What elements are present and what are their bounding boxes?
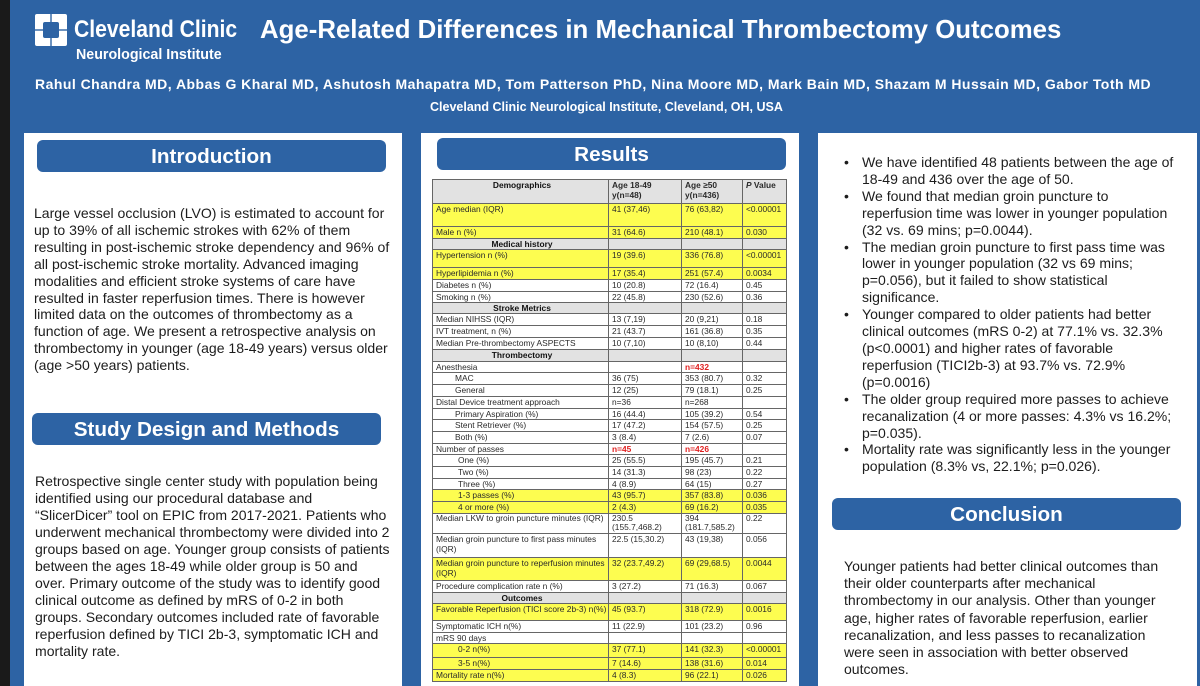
results table: P Value — [746, 180, 776, 190]
results table: 0.07 — [746, 432, 762, 442]
results table: (155.7,468.2) — [612, 522, 662, 532]
results table: <0.00001 — [746, 250, 781, 260]
results table: 43 (95.7) — [612, 490, 646, 500]
heading: Results: Results — [574, 143, 649, 166]
results table: 0.54 — [746, 409, 762, 419]
text block: results bullets: p=0.035). — [862, 424, 922, 440]
heading: Conclusion: Conclusion — [950, 503, 1063, 526]
results table: n=432 — [685, 362, 709, 372]
results table: 10 (8,10) — [685, 338, 719, 348]
results table: Anesthesia — [436, 362, 477, 372]
text block: conclusion: outcomes. — [844, 661, 909, 677]
text block: introduction: Large vessel occlusion (LVO) is estimated to account for — [34, 205, 384, 221]
results table: 72 (16.4) — [685, 280, 719, 290]
results table: Primary Aspiration (%) — [455, 409, 538, 419]
results table: Distal Device treatment approach — [436, 397, 560, 407]
panel: right column — [818, 133, 1197, 686]
results table: 22 (45.8) — [612, 292, 646, 302]
text block: conclusion — [844, 558, 1158, 677]
text block: introduction: limited data on the outcomes of thrombectomy as a — [34, 306, 353, 322]
results table: 230 (52.6) — [685, 292, 723, 302]
text block: methods: “SlicerDicer” tool on EPIC from 2017-2021. Patients who — [35, 507, 386, 523]
results table: 71 (16.3) — [685, 581, 719, 591]
text block: results bullets: (p<0.0001) and higher rates of favorable — [862, 340, 1113, 356]
heading: Study Design and Methods: Study Design and Methods — [74, 418, 339, 441]
logo wordmark: Cleveland Clinic — [74, 16, 237, 43]
results table: n=426 — [685, 444, 709, 454]
results table: 0.0044 — [746, 558, 772, 568]
text block: methods: mortality rate. — [35, 643, 120, 659]
results table: 141 (32.3) — [685, 644, 723, 654]
results table: 0.21 — [746, 455, 762, 465]
results table: Medical history — [492, 239, 552, 249]
results table: 10 (7,10) — [612, 338, 646, 348]
text block: results bullets: recanalization (4 or more passes: 4.3% vs 16.2%; — [862, 408, 1171, 424]
results table: Procedure complication rate n (%) — [436, 581, 563, 591]
results table: Outcomes — [502, 593, 542, 603]
text block: results bullets: reperfusion (TICI2b-3) at 93.7% vs. 72.9% — [862, 357, 1125, 373]
text block: results bullets: We have identified 48 patients between the age of — [862, 154, 1173, 170]
results table: Stroke Metrics — [493, 303, 551, 313]
text block: conclusion: Younger patients had better clinical outcomes than — [844, 558, 1158, 574]
text block: results bullets: The median groin puncture to first pass time was — [862, 239, 1165, 255]
results table: Symptomatic ICH n(%) — [436, 621, 521, 631]
bullet markers: • — [844, 239, 849, 255]
results table: 0-2 n(%) — [458, 644, 490, 654]
results table: 0.96 — [746, 621, 762, 631]
text block: introduction: resulting in post-ischemic stroke dependency and 96% of — [34, 239, 389, 255]
text block: methods: between the ages 18-49 while older group is 50 and — [35, 558, 358, 574]
results table: n=268 — [685, 397, 709, 407]
results table: Median NIHSS (IQR) — [436, 314, 514, 324]
results table: 0.030 — [746, 227, 767, 237]
heading: Conclusion — [832, 498, 1181, 530]
results table: 13 (7,19) — [612, 314, 646, 324]
results table: 0.026 — [746, 670, 767, 680]
results table: 0.35 — [746, 326, 762, 336]
heading: Results — [437, 138, 786, 170]
results table: 76 (63,82) — [685, 204, 723, 214]
results table: 17 (35.4) — [612, 268, 646, 278]
results table: Thrombectomy — [492, 350, 552, 360]
results table: 0.45 — [746, 280, 762, 290]
text block: conclusion: were seen in association with better observed — [844, 644, 1128, 660]
text block: methods: groups based on age. Younger group consists of patients — [35, 541, 390, 557]
results table: Three (%) — [458, 479, 495, 489]
results table: 10 (20.8) — [612, 280, 646, 290]
results table: 17 (47.2) — [612, 420, 646, 430]
text block: introduction: resulted in faster reperfusion times. There is however — [34, 290, 365, 306]
results table: Both (%) — [455, 432, 488, 442]
results table: 251 (57.4) — [685, 268, 723, 278]
results table: Hyperlipidemia n (%) — [436, 268, 514, 278]
results table: 64 (15) — [685, 479, 712, 489]
results table: 41 (37,46) — [612, 204, 650, 214]
results table: Median groin puncture to reperfusion minutes — [436, 558, 605, 568]
logo subtitle: Neurological Institute — [76, 46, 222, 63]
results table: 0.27 — [746, 479, 762, 489]
results table: 7 (14.6) — [612, 658, 641, 668]
text block: methods: groups. Secondary outcomes included rate of favorable — [35, 609, 379, 625]
panel: middle column — [421, 133, 799, 686]
authors: Rahul Chandra MD, Abbas G Kharal MD, Ashutosh Mahapatra MD, Tom Patterson PhD, Nina Moore MD, Mark Bain MD, Shazam M Hussain MD, Gabor Toth MD — [35, 76, 1151, 92]
text block: results bullets: We found that median groin puncture to — [862, 188, 1108, 204]
text block: methods: clinical outcome as defined by mRS of 0-2 in both — [35, 592, 343, 608]
text block: introduction — [34, 205, 390, 373]
text block: results bullets: Mortality rate was significantly less in the younger — [862, 441, 1170, 457]
results table: 79 (18.1) — [685, 385, 719, 395]
results table: Two (%) — [458, 467, 489, 477]
results table: 195 (45.7) — [685, 455, 723, 465]
results table: n=45 — [612, 444, 631, 454]
results table: 161 (36.8) — [685, 326, 723, 336]
results table: 69 (16.2) — [685, 502, 719, 512]
results table: 3 (27.2) — [612, 581, 641, 591]
results table: (181.7,585.2) — [685, 522, 735, 532]
results table: Male n (%) — [436, 227, 476, 237]
results table: 7 (2.6) — [685, 432, 709, 442]
results table: 0.035 — [746, 502, 767, 512]
results table: 1-3 passes (%) — [458, 490, 514, 500]
results table: 0.036 — [746, 490, 767, 500]
text block: introduction: all post-ischemic stroke mortality. Advanced imaging — [34, 256, 359, 272]
results table: 101 (23.2) — [685, 621, 723, 631]
text block: methods: Retrospective single center study with population being — [35, 473, 378, 489]
results table: 32 (23.7,49.2) — [612, 558, 664, 568]
results table: 0.25 — [746, 385, 762, 395]
results table: 36 (75) — [612, 373, 639, 383]
results table: Number of passes — [436, 444, 504, 454]
results table: 43 (19,38) — [685, 534, 723, 544]
results table: y(n=436) — [685, 190, 719, 200]
results table: Median Pre-thrombectomy ASPECTS — [436, 338, 576, 348]
bullet markers: • — [844, 154, 849, 170]
results table: Smoking n (%) — [436, 292, 491, 302]
results table: 98 (23) — [685, 467, 712, 477]
results table: 0.014 — [746, 658, 767, 668]
results table: (IQR) — [436, 568, 456, 578]
results table: 12 (25) — [612, 385, 639, 395]
results table: 4 (8.9) — [612, 479, 636, 489]
results table: mRS 90 days — [436, 633, 486, 643]
text block: introduction: modalities and efficient stroke systems of care have — [34, 273, 355, 289]
results table: 20 (9,21) — [685, 314, 719, 324]
results table: 0.18 — [746, 314, 762, 324]
text block: results bullets: 18-49 and 436 over the age of 50. — [862, 171, 1074, 187]
results table: 19 (39.6) — [612, 250, 646, 260]
text block: methods: over. Primary outcome of the study was to identify good — [35, 575, 380, 591]
results table: 154 (57.5) — [685, 420, 723, 430]
results table: IVT treatment, n (%) — [436, 326, 511, 336]
text block: introduction: thrombectomy in younger (age 18-49 years) versus older — [34, 340, 388, 356]
results table: One (%) — [458, 455, 489, 465]
text block: results bullets: significance. — [862, 289, 939, 305]
results table: General — [455, 385, 485, 395]
results table: 69 (29,68.5) — [685, 558, 730, 568]
results table: Mortality rate n(%) — [436, 670, 504, 680]
text block: results bullets: (32 vs. 69 mins; p=0.0044). — [862, 222, 1033, 238]
results table: 2 (4.3) — [612, 502, 636, 512]
text block: introduction: up to 39% of all ischemic strokes with 62% of them — [34, 222, 350, 238]
icon: Cleveland Clinic logo — [35, 14, 67, 46]
text block: results bullets: (p=0.0016) — [862, 374, 930, 390]
results table: Favorable Reperfusion (TICI score 2b-3) n(%) — [436, 604, 606, 614]
results table: 0.067 — [746, 581, 767, 591]
results table: 45 (93.7) — [612, 604, 646, 614]
text block: methods: underwent mechanical thrombectomy were divided into 2 — [35, 524, 389, 540]
results table: 4 (8.3) — [612, 670, 636, 680]
text block: results bullets: Younger compared to older patients had better — [862, 306, 1151, 322]
results table: 4 or more (%) — [458, 502, 509, 512]
results table: 22.5 (15,30.2) — [612, 534, 664, 544]
results table: 138 (31.6) — [685, 658, 723, 668]
results table: <0.00001 — [746, 204, 781, 214]
results table: Median groin puncture to first pass minutes — [436, 534, 596, 544]
results table: 0.32 — [746, 373, 762, 383]
affiliation: Cleveland Clinic Neurological Institute, Cleveland, OH, USA — [430, 100, 783, 114]
text block: results bullets — [862, 154, 1174, 474]
results table: 37 (77.1) — [612, 644, 646, 654]
results table: 0.0034 — [746, 268, 772, 278]
results table: 357 (83.8) — [685, 490, 723, 500]
results table: Age 18-49 — [612, 180, 652, 190]
text block: methods: reperfusion defined by TICI 2b-3, symptomatic ICH and — [35, 626, 378, 642]
results table: Age median (IQR) — [436, 204, 504, 214]
results table: (IQR) — [436, 544, 456, 554]
text block: conclusion: age, higher rates of favorable reperfusion, earlier — [844, 610, 1148, 626]
results table: n=36 — [612, 397, 631, 407]
bullet markers: • — [844, 441, 849, 457]
results table: MAC — [455, 373, 474, 383]
results table: Stent Retriever (%) — [455, 420, 526, 430]
bullet markers: • — [844, 188, 849, 204]
results table: Diabetes n (%) — [436, 280, 491, 290]
results table: 14 (31.3) — [612, 467, 646, 477]
text block: results bullets: p=0.056), but it failed to show statistical — [862, 272, 1108, 288]
text block: introduction: (age >50 years) patients. — [34, 357, 190, 373]
results table: <0.00001 — [746, 644, 781, 654]
text block: results bullets: clinical outcomes (mRS 0-2) at 77.1% vs. 32.3% — [862, 323, 1163, 339]
results table: 11 (22.9) — [612, 621, 645, 631]
results table: 31 (64.6) — [612, 227, 646, 237]
panel: left column — [24, 133, 402, 686]
results table: 0.0016 — [746, 604, 772, 614]
text block: conclusion: recanalization, and less passes to recanalization — [844, 627, 1145, 643]
results table: 16 (44.4) — [612, 409, 646, 419]
text block: results bullets: population (8.3% vs, 22.1%; p=0.026). — [862, 458, 1101, 474]
results table: Hypertension n (%) — [436, 250, 508, 260]
results table: 0.056 — [746, 534, 767, 544]
title: Age-Related Differences in Mechanical Thrombectomy Outcomes — [260, 16, 1061, 44]
results table: 0.22 — [746, 467, 762, 477]
results table: 105 (39.2) — [685, 409, 723, 419]
results table: 3 (8.4) — [612, 432, 636, 442]
results table: 0.36 — [746, 292, 762, 302]
heading: Study Design and Methods — [32, 413, 381, 445]
results table: 210 (48.1) — [685, 227, 723, 237]
text block: results bullets: The older group required more passes to achieve — [862, 391, 1169, 407]
results table: Demographics — [493, 180, 551, 190]
text block: results bullets: reperfusion time was lower in younger population — [862, 205, 1167, 221]
results table: 25 (55.5) — [612, 455, 646, 465]
results table: 336 (76.8) — [685, 250, 723, 260]
text block: methods: identified using our procedural database and — [35, 490, 312, 506]
results table: 96 (22.1) — [685, 670, 719, 680]
heading: Introduction: Introduction — [151, 145, 272, 168]
text block: methods — [35, 473, 390, 659]
heading: Introduction — [37, 140, 386, 172]
results table: 318 (72.9) — [685, 604, 723, 614]
results table: 353 (80.7) — [685, 373, 723, 383]
results table: y(n=48) — [612, 190, 642, 200]
text block: conclusion: their older counterparts after mechanical — [844, 575, 1095, 591]
dark left edge — [0, 0, 10, 686]
bullet markers: • — [844, 391, 849, 407]
results table: 21 (43.7) — [612, 326, 646, 336]
results table: 0.44 — [746, 338, 762, 348]
text block: conclusion: thrombectomy in our analysis. Other than younger — [844, 592, 1156, 608]
results table: Age ≥50 — [685, 180, 717, 190]
results table: 0.25 — [746, 420, 762, 430]
text block: results bullets: lower in younger population (32 vs 69 mins; — [862, 255, 1133, 271]
results table: 3-5 n(%) — [458, 658, 490, 668]
text block: introduction: function of age. We present a retrospective analysis on — [34, 323, 376, 339]
bullet markers: • — [844, 306, 849, 322]
results table — [432, 179, 787, 682]
bullet markers — [844, 154, 849, 457]
